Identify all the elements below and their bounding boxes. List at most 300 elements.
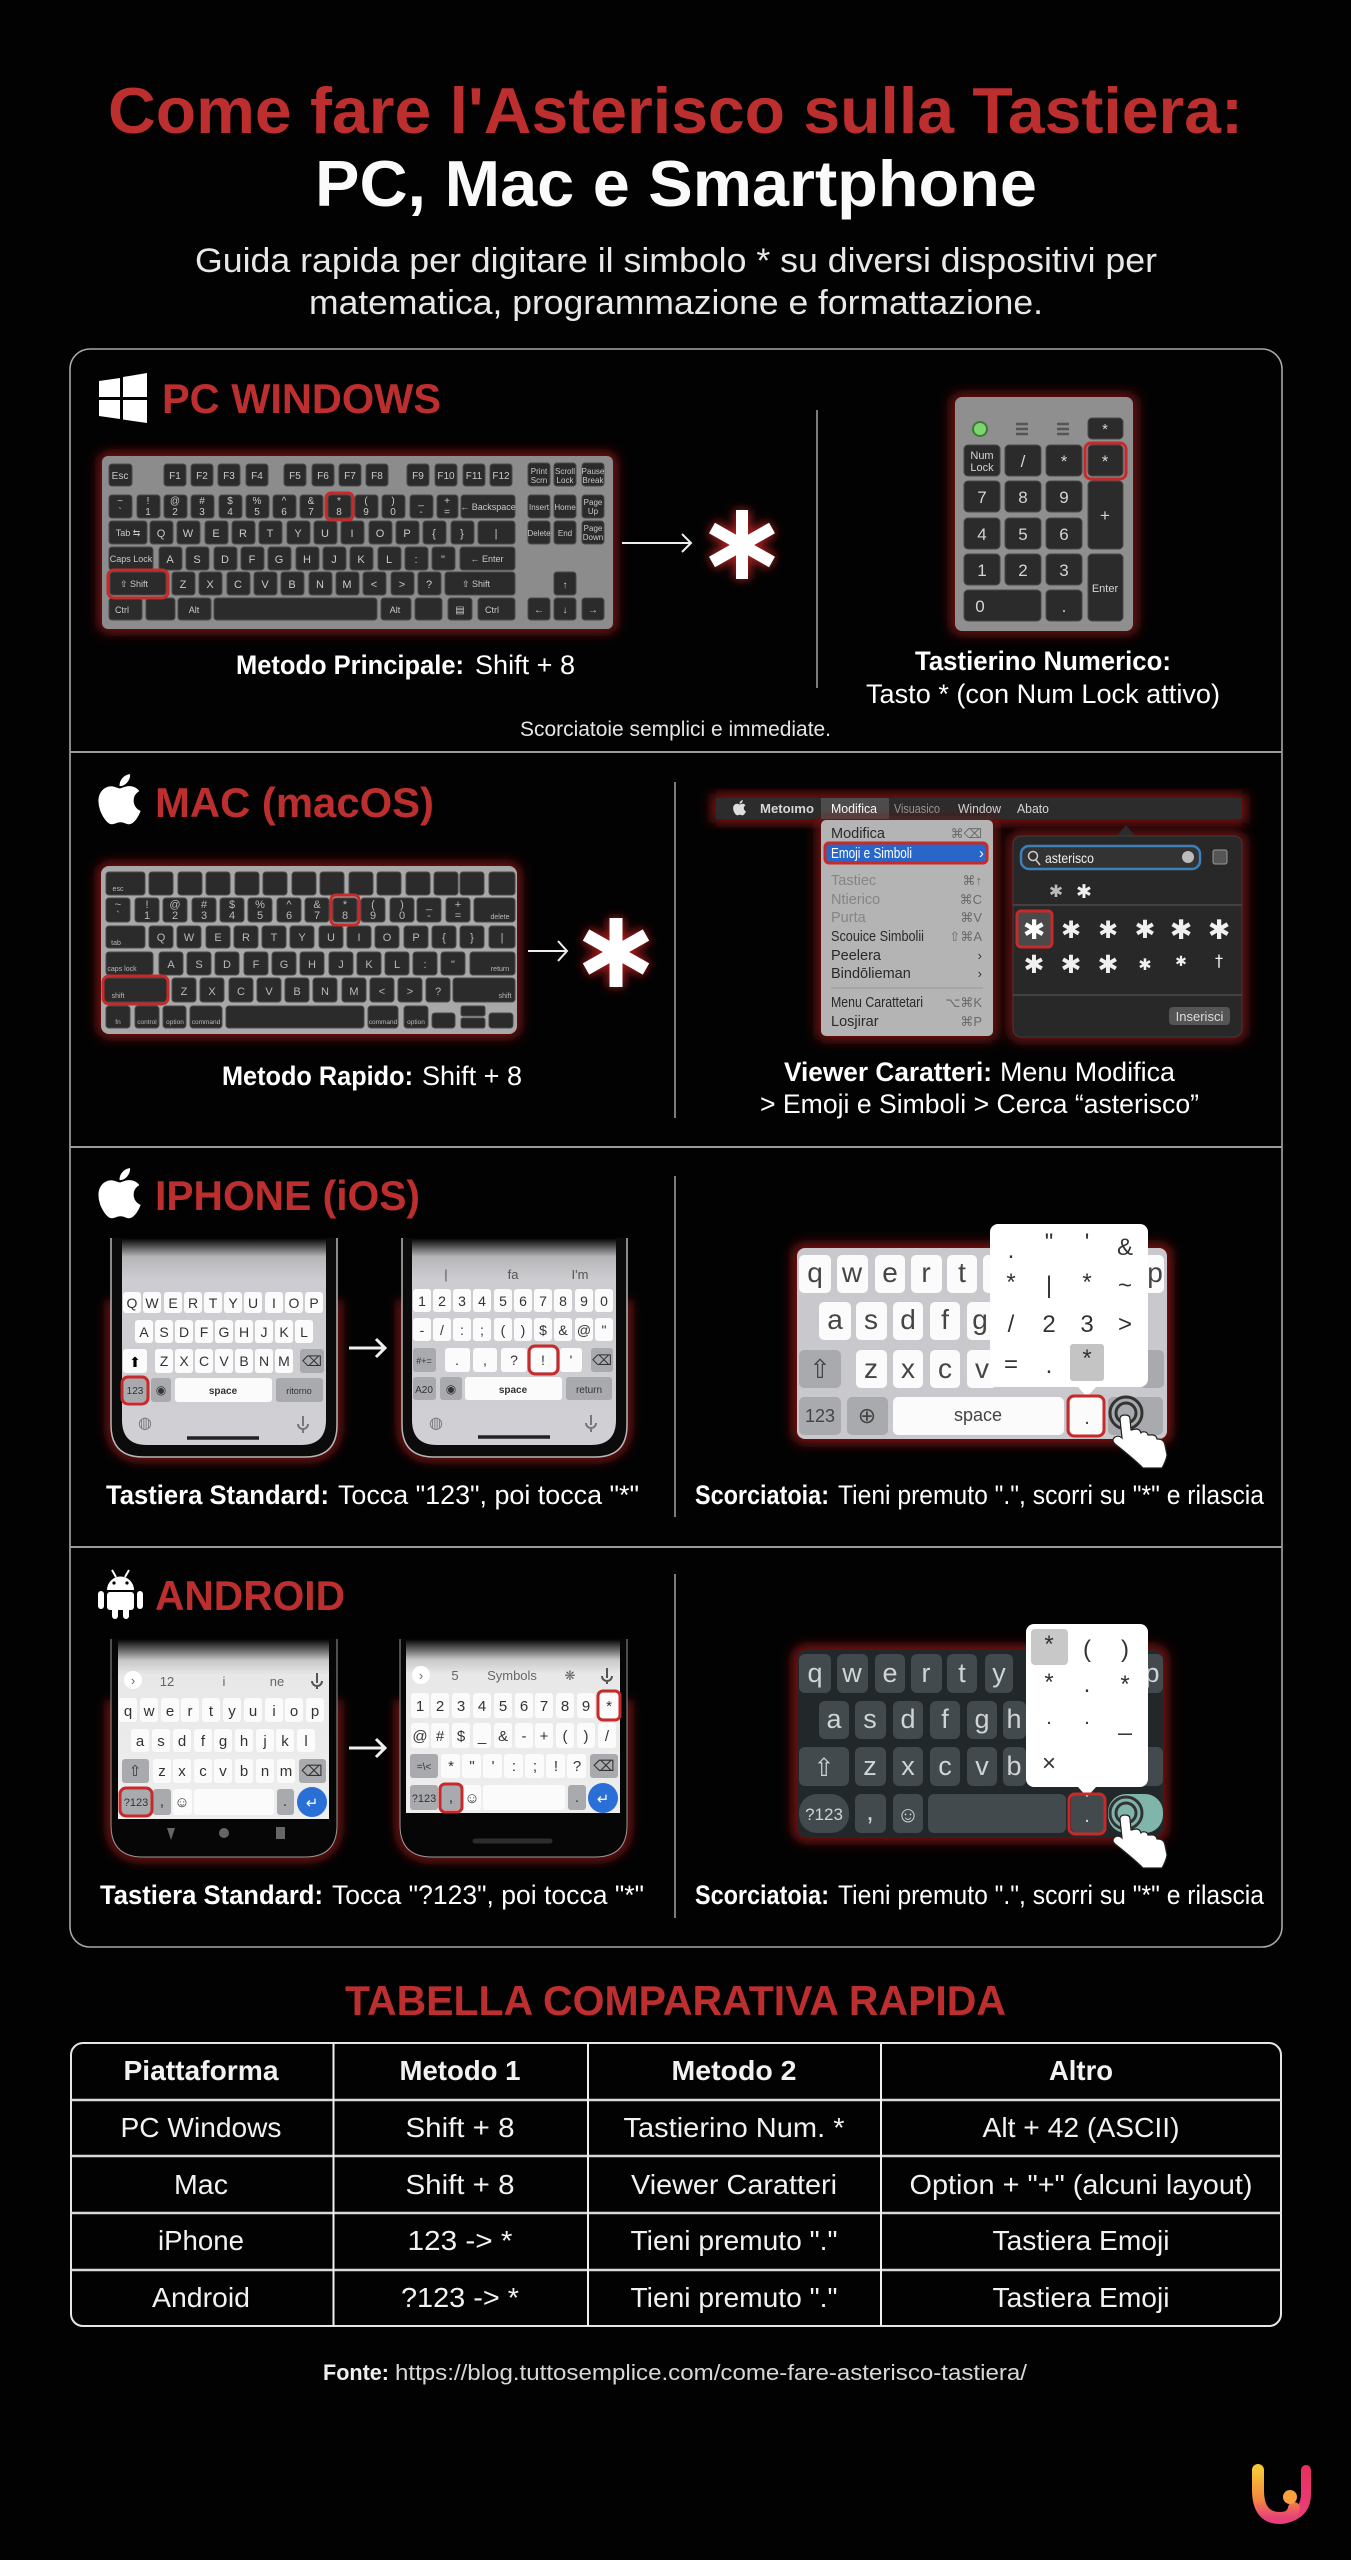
Mac keyboard: & bbox=[313, 899, 321, 911]
phone: standard keyboard: J bbox=[260, 1324, 268, 1340]
phone: symbol keyboard: . bbox=[455, 1352, 459, 1368]
Mac keyboard: # bbox=[201, 899, 208, 911]
phone: symbol keyboard: 3 bbox=[458, 1293, 466, 1309]
PC keyboard: F3 bbox=[223, 471, 235, 482]
phone: standard keyboard: ⌫ bbox=[301, 1763, 323, 1780]
Mac keyboard: shift bbox=[499, 993, 511, 1000]
section: Android bbox=[98, 1570, 1265, 1918]
caption: character viewer: > Emoji e Simboli > Cerca “asterisco” bbox=[760, 1089, 1199, 1119]
PC keyboard: 0 bbox=[390, 507, 396, 518]
row: iPhone: iPhone bbox=[158, 2225, 244, 2256]
PC keyboard: Tab ⇆ bbox=[116, 528, 141, 538]
phone: symbol keyboard: 1 bbox=[416, 1698, 424, 1715]
PC keyboard: C bbox=[234, 579, 242, 591]
row: Android: Tieni premuto "." bbox=[630, 2282, 838, 2313]
caption: standard keyboard: Tastiera Standard: bbox=[100, 1880, 323, 1910]
PC keyboard bbox=[99, 453, 616, 632]
row: Mac: Mac bbox=[174, 2169, 228, 2200]
phone: symbol keyboard: 5 bbox=[451, 1668, 459, 1683]
popup: symbol choices: 2 bbox=[1042, 1311, 1056, 1338]
phone: standard keyboard: k bbox=[281, 1733, 289, 1750]
Mac keyboard: F bbox=[253, 959, 260, 971]
caption: main method: Shift + 8 bbox=[475, 650, 575, 680]
PC keyboard: W bbox=[183, 528, 194, 540]
dropdown menu: Modifica bbox=[831, 826, 886, 842]
keyboard with long-press popup: . bbox=[1084, 1407, 1090, 1429]
phone: symbol keyboard: ⌫ bbox=[593, 1758, 615, 1775]
Mac keyboard: option bbox=[407, 1019, 425, 1026]
popup: symbol choices: * bbox=[1044, 1631, 1054, 1658]
phone: symbol keyboard: #+= bbox=[416, 1356, 432, 1366]
popup: symbol choices: ~ bbox=[1118, 1272, 1132, 1299]
phone: symbol keyboard: / bbox=[440, 1322, 444, 1338]
phone: standard keyboard: W bbox=[145, 1295, 159, 1311]
PC keyboard: > bbox=[399, 579, 405, 591]
table header bbox=[124, 2055, 1113, 2086]
popup: symbol choices: * bbox=[1082, 1345, 1092, 1372]
phone: standard keyboard: V bbox=[219, 1353, 229, 1369]
phone: standard keyboard: h bbox=[240, 1733, 248, 1750]
phone: symbol keyboard: =\< bbox=[417, 1762, 431, 1773]
PC keyboard: & bbox=[308, 496, 315, 507]
phone: standard keyboard: B bbox=[239, 1353, 249, 1369]
title bbox=[108, 74, 1243, 220]
popup: symbol choices: * bbox=[1044, 1669, 1054, 1696]
PC keyboard: B bbox=[288, 579, 296, 591]
table header: Metodo 1 bbox=[400, 2055, 520, 2086]
caption: standard keyboard: Tocca "?123", poi tocca "*" bbox=[332, 1880, 644, 1910]
dark keyboard with long-press popup: g bbox=[974, 1704, 990, 1734]
menu bar bbox=[712, 794, 1246, 823]
PC keyboard: R bbox=[239, 528, 247, 540]
PC keyboard: V bbox=[261, 579, 269, 591]
phone: symbol keyboard: " bbox=[602, 1322, 607, 1338]
PC keyboard: ← Backspace bbox=[460, 502, 516, 512]
phone: standard keyboard: ◍ bbox=[138, 1415, 152, 1432]
popup: symbol choices: " bbox=[1045, 1229, 1053, 1256]
dropdown menu: ⌘C bbox=[960, 892, 982, 907]
character viewer: † bbox=[1215, 951, 1223, 970]
phone: standard keyboard: l bbox=[304, 1733, 308, 1750]
phone: standard keyboard: space bbox=[209, 1386, 238, 1397]
phone: symbol keyboard: 1 bbox=[418, 1293, 426, 1309]
phone: standard keyboard: Y bbox=[228, 1295, 238, 1311]
section: iPhone bbox=[98, 1168, 1265, 1517]
phone: symbol keyboard bbox=[400, 1639, 627, 1857]
numeric keypad: Enter bbox=[1092, 583, 1118, 595]
row: PC Windows: PC Windows bbox=[120, 2112, 282, 2143]
keyboard with long-press popup: r bbox=[921, 1257, 931, 1288]
caption: character viewer bbox=[760, 1057, 1199, 1119]
phone: standard keyboard bbox=[111, 1639, 337, 1857]
character viewer: ✱ bbox=[1061, 950, 1081, 979]
heading: iPhone: IPHONE (iOS) bbox=[155, 1172, 420, 1219]
popup: symbol choices: . bbox=[1046, 1352, 1052, 1379]
Mac keyboard: R bbox=[242, 932, 250, 944]
PC keyboard: N bbox=[316, 579, 324, 591]
PC keyboard: 4 bbox=[227, 507, 233, 518]
dark keyboard with long-press popup: e bbox=[882, 1658, 898, 1688]
phone: symbol keyboard: @ bbox=[577, 1322, 591, 1338]
popup: symbol choices: * bbox=[1082, 1269, 1092, 1296]
numeric keypad: 3 bbox=[1059, 561, 1069, 580]
dark keyboard with long-press popup: d bbox=[900, 1704, 916, 1734]
PC keyboard: Page bbox=[584, 524, 603, 533]
popup: symbol choices: * bbox=[1120, 1671, 1130, 1698]
phone: standard keyboard: N bbox=[259, 1353, 269, 1369]
dark keyboard with long-press popup: y bbox=[992, 1658, 1006, 1688]
Mac keyboard: T bbox=[271, 932, 278, 944]
phone: symbol keyboard: . bbox=[575, 1789, 579, 1806]
phone: symbol keyboard: › bbox=[419, 1668, 423, 1683]
Mac keyboard: 3 bbox=[201, 910, 207, 922]
PC keyboard: Up bbox=[588, 507, 599, 516]
popup: symbol choices bbox=[990, 1224, 1148, 1397]
phone: standard keyboard: s bbox=[157, 1733, 165, 1750]
dark keyboard with long-press popup bbox=[793, 1624, 1167, 1868]
Mac keyboard: A bbox=[167, 959, 175, 971]
phone: symbol keyboard: / bbox=[605, 1728, 610, 1745]
caption: shortcut: Scorciatoia: bbox=[695, 1880, 829, 1910]
dark keyboard with long-press popup: z bbox=[863, 1751, 877, 1781]
PC keyboard: S bbox=[193, 554, 201, 566]
caption: shortcut: Scorciatoia: bbox=[695, 1480, 829, 1510]
section: PC Windows bbox=[99, 373, 1220, 741]
dropdown menu: ⌘⌫ bbox=[951, 826, 982, 841]
Mac keyboard bbox=[98, 863, 520, 1037]
title: PC, Mac e Smartphone bbox=[315, 147, 1037, 220]
PC keyboard: ) bbox=[391, 496, 395, 507]
phone: symbol keyboard: fa bbox=[508, 1267, 519, 1282]
numeric keypad: 2 bbox=[1018, 561, 1028, 580]
Mac keyboard: esc bbox=[113, 886, 124, 893]
Mac keyboard: * bbox=[343, 899, 348, 911]
numeric keypad: 5 bbox=[1018, 525, 1028, 544]
Mac keyboard: I bbox=[357, 932, 361, 944]
caption: numeric keypad bbox=[866, 646, 1220, 709]
phone: symbol keyboard: ☺ bbox=[464, 1790, 480, 1807]
phone: standard keyboard: T bbox=[209, 1295, 218, 1311]
caption: quick method bbox=[222, 1061, 522, 1091]
highlight: ?123 key bbox=[120, 1788, 152, 1816]
caption: quick method: Metodo Rapido: bbox=[222, 1061, 413, 1091]
PC keyboard: M bbox=[342, 579, 352, 591]
Mac keyboard: 8 bbox=[342, 910, 348, 922]
Mac keyboard: Y bbox=[298, 932, 306, 944]
phone: symbol keyboard: * bbox=[606, 1698, 612, 1715]
PC keyboard: } bbox=[460, 528, 464, 540]
PC keyboard: ( bbox=[364, 496, 368, 507]
PC keyboard: Home bbox=[554, 503, 576, 512]
phone: symbol keyboard: ? bbox=[510, 1352, 518, 1368]
phone: symbol keyboard: ; bbox=[533, 1758, 537, 1775]
PC keyboard: ⇧ Shift bbox=[462, 579, 491, 589]
table header: Altro bbox=[1049, 2055, 1113, 2086]
phone: symbol keyboard: 7 bbox=[540, 1698, 548, 1715]
popup: symbol choices: & bbox=[1117, 1234, 1133, 1261]
phone: symbol keyboard: - bbox=[522, 1728, 526, 1745]
popup: symbol choices: = bbox=[1004, 1351, 1018, 1378]
phone: standard keyboard bbox=[111, 1238, 337, 1457]
character viewer: ✱ bbox=[1061, 916, 1081, 944]
dropdown menu: › bbox=[978, 948, 982, 963]
phone: symbol keyboard: _ bbox=[477, 1728, 487, 1745]
heading: Mac: MAC (macOS) bbox=[155, 779, 434, 826]
PC keyboard: → bbox=[588, 605, 598, 616]
PC keyboard: F1 bbox=[169, 471, 181, 482]
phone: symbol keyboard: : bbox=[512, 1758, 516, 1775]
character viewer: ✱ bbox=[1098, 950, 1118, 979]
phone: symbol keyboard: I'm bbox=[572, 1267, 588, 1282]
source: Fonte: bbox=[323, 2360, 389, 2385]
PC keyboard: J bbox=[331, 554, 337, 566]
phone: standard keyboard: › bbox=[131, 1673, 135, 1688]
dark keyboard with long-press popup: b bbox=[1006, 1751, 1022, 1781]
dark keyboard with long-press popup: w bbox=[841, 1658, 862, 1688]
Mac keyboard: option bbox=[166, 1019, 184, 1026]
dropdown menu: Ntierico bbox=[831, 892, 880, 908]
PC keyboard: # bbox=[199, 496, 205, 507]
phone: symbol keyboard: ⌫ bbox=[592, 1352, 612, 1368]
phone: standard keyboard: o bbox=[290, 1703, 298, 1720]
highlight: key 8 bbox=[331, 895, 359, 925]
phone: standard keyboard: P bbox=[309, 1295, 319, 1311]
caption: numeric keypad: Tasto * (con Num Lock attivo) bbox=[866, 679, 1220, 709]
character viewer: ✱ bbox=[1208, 915, 1230, 946]
Mac keyboard: 2 bbox=[172, 910, 178, 922]
numeric keypad: 0 bbox=[975, 597, 985, 616]
PC keyboard: End bbox=[558, 529, 572, 538]
PC keyboard: Caps Lock bbox=[110, 554, 153, 564]
PC keyboard: ← bbox=[534, 605, 544, 616]
Mac keyboard: 5 bbox=[257, 910, 263, 922]
dropdown menu: Scouice Simbolii bbox=[831, 929, 924, 945]
caption: standard keyboard: Tastiera Standard: bbox=[106, 1480, 329, 1510]
character viewer: asterisco bbox=[1045, 850, 1094, 866]
row: iPhone: Tastiera Emoji bbox=[992, 2225, 1170, 2256]
highlight: period key bbox=[1069, 1794, 1105, 1834]
popup: symbol choices: ) bbox=[1121, 1636, 1129, 1663]
row: Mac: Viewer Caratteri bbox=[631, 2169, 837, 2200]
phone: symbol keyboard: A20 bbox=[415, 1385, 433, 1396]
phone: symbol keyboard: 9 bbox=[582, 1698, 590, 1715]
section: Mac bbox=[98, 774, 1246, 1119]
highlight: Emoji e Simboli: Emoji e Simboli bbox=[831, 846, 912, 862]
PC keyboard: A bbox=[166, 554, 174, 566]
phone: standard keyboard: A bbox=[139, 1324, 149, 1340]
icon: Windows logo bbox=[99, 373, 147, 423]
PC keyboard: 9 bbox=[363, 507, 369, 518]
PC keyboard: Down bbox=[583, 533, 603, 542]
Mac keyboard: 0 bbox=[399, 910, 405, 922]
keyboard with long-press popup: z bbox=[864, 1353, 878, 1384]
character viewer: ✱ bbox=[1170, 915, 1192, 946]
Mac keyboard: Q bbox=[157, 932, 166, 944]
keyboard with long-press popup: c bbox=[938, 1353, 952, 1384]
PC keyboard: * bbox=[337, 496, 341, 507]
PC keyboard: F2 bbox=[196, 471, 208, 482]
dark keyboard with long-press popup: ⇧ bbox=[814, 1754, 834, 1782]
phone: symbol keyboard: 5 bbox=[499, 1698, 507, 1715]
PC keyboard: Lock bbox=[557, 476, 574, 485]
Mac keyboard: : bbox=[423, 959, 427, 971]
PC keyboard: F9 bbox=[412, 471, 424, 482]
Mac keyboard: tab bbox=[111, 940, 121, 947]
phone: symbol keyboard: return bbox=[576, 1385, 602, 1396]
character viewer: ✱ bbox=[1138, 955, 1152, 974]
caption: quick method: Shift + 8 bbox=[422, 1061, 522, 1091]
Mac keyboard: B bbox=[293, 986, 301, 998]
phone: standard keyboard: I bbox=[272, 1295, 276, 1311]
Mac keyboard: W bbox=[184, 932, 195, 944]
row: iPhone: Tieni premuto "." bbox=[630, 2225, 838, 2256]
keyboard with long-press popup: d bbox=[900, 1304, 916, 1335]
phone: standard keyboard: ritorno bbox=[286, 1386, 312, 1396]
keyboard with long-press popup: s bbox=[864, 1304, 878, 1335]
dark keyboard with long-press popup: v bbox=[975, 1751, 989, 1781]
phone: standard keyboard: z bbox=[158, 1763, 166, 1780]
popup: symbol choices: / bbox=[1008, 1311, 1015, 1338]
phone: standard keyboard: 12 bbox=[160, 1674, 174, 1689]
phone: standard keyboard: b bbox=[240, 1763, 248, 1780]
PC keyboard: = bbox=[444, 507, 450, 518]
phone: standard keyboard: i bbox=[272, 1703, 276, 1720]
keyboard with long-press popup bbox=[793, 1224, 1171, 1468]
phone: standard keyboard: R bbox=[188, 1295, 198, 1311]
Mac keyboard: - bbox=[427, 910, 431, 922]
numeric keypad: 9 bbox=[1059, 488, 1069, 507]
PC keyboard: Esc bbox=[112, 471, 128, 482]
Mac keyboard: $ bbox=[229, 899, 235, 911]
Mac keyboard: control bbox=[137, 1019, 157, 1026]
character viewer: ✱ bbox=[1023, 915, 1045, 946]
phone: symbol keyboard: + bbox=[540, 1728, 549, 1745]
highlight: key 8 bbox=[326, 493, 353, 520]
phone: symbol keyboard: Symbols bbox=[487, 1668, 537, 1683]
PC keyboard: F11 bbox=[466, 471, 483, 482]
highlight: period key bbox=[1068, 1396, 1104, 1436]
phone: symbol keyboard bbox=[402, 1238, 627, 1457]
caption: shortcut: Tieni premuto ".", scorri su "*" e rilascia bbox=[838, 1880, 1265, 1910]
dark keyboard with long-press popup: q bbox=[807, 1658, 823, 1688]
PC keyboard: 3 bbox=[199, 507, 205, 518]
highlight: Emoji e Simboli: › bbox=[979, 846, 984, 862]
PC keyboard: Y bbox=[294, 528, 302, 540]
phone: symbol keyboard: ! bbox=[541, 1352, 545, 1368]
arrow bbox=[349, 1339, 385, 1357]
Mac keyboard: { bbox=[442, 932, 446, 944]
PC keyboard: F7 bbox=[344, 471, 356, 482]
character viewer: ✱ bbox=[1098, 916, 1118, 944]
row: Mac: Option + "+" (alcuni layout) bbox=[910, 2169, 1252, 2200]
phone: standard keyboard: 123 bbox=[127, 1386, 144, 1397]
Mac keyboard: P bbox=[412, 932, 420, 944]
Mac keyboard: fn bbox=[115, 1019, 121, 1026]
numeric keypad bbox=[951, 394, 1137, 634]
phone: symbol keyboard: # bbox=[436, 1728, 445, 1745]
PC keyboard: $ bbox=[227, 496, 233, 507]
table header: Piattaforma bbox=[124, 2055, 279, 2086]
phone: symbol keyboard: ; bbox=[480, 1322, 484, 1338]
phone: symbol keyboard: & bbox=[498, 1728, 508, 1745]
heading: Android: ANDROID bbox=[155, 1572, 345, 1619]
phone: standard keyboard: w bbox=[143, 1703, 155, 1720]
PC keyboard: Alt bbox=[390, 605, 401, 615]
phone: standard keyboard: Z bbox=[160, 1353, 169, 1369]
dark keyboard with long-press popup: ☺ bbox=[897, 1802, 919, 1827]
subtitle bbox=[195, 242, 1157, 322]
dark keyboard with long-press popup: a bbox=[826, 1704, 842, 1734]
menu bar: Window bbox=[958, 801, 1002, 816]
caption: numeric keypad: Tastierino Numerico: bbox=[915, 646, 1171, 676]
PC keyboard: Alt bbox=[189, 605, 200, 615]
Mac keyboard: E bbox=[214, 932, 222, 944]
phone: standard keyboard: . bbox=[283, 1793, 287, 1810]
phone: standard keyboard: C bbox=[199, 1353, 209, 1369]
note: Scorciatoie semplici e immediate. bbox=[520, 718, 831, 741]
phone: symbol keyboard: ↵ bbox=[597, 1791, 609, 1808]
Mac keyboard: 9 bbox=[370, 910, 376, 922]
keyboard with long-press popup: p bbox=[1147, 1257, 1163, 1288]
Mac keyboard: L bbox=[394, 959, 400, 971]
phone: symbol keyboard: $ bbox=[457, 1728, 466, 1745]
dropdown menu: ⌘V bbox=[960, 910, 982, 925]
PC keyboard: 6 bbox=[281, 507, 287, 518]
phone: symbol keyboard: 5 bbox=[499, 1293, 507, 1309]
menu bar: Metoımo bbox=[760, 801, 814, 816]
highlight: Emoji e Simboli bbox=[825, 843, 987, 863]
keyboard with long-press popup: space bbox=[954, 1405, 1002, 1425]
PC keyboard: F4 bbox=[251, 471, 263, 482]
phone: symbol keyboard: , bbox=[483, 1352, 487, 1368]
Mac keyboard: + bbox=[455, 899, 461, 911]
phone: standard keyboard: m bbox=[280, 1763, 292, 1780]
row: PC Windows bbox=[120, 2112, 1180, 2143]
phone: standard keyboard: ne bbox=[270, 1674, 284, 1689]
PC keyboard: ~ bbox=[117, 496, 123, 507]
table header: Metodo 2 bbox=[672, 2055, 796, 2086]
PC keyboard: 5 bbox=[254, 507, 260, 518]
row: PC Windows: Shift + 8 bbox=[406, 2112, 514, 2143]
highlight: keypad asterisk bbox=[1085, 443, 1126, 479]
phone: symbol keyboard: ?123 bbox=[412, 1793, 436, 1805]
dropdown menu: Peelera bbox=[831, 948, 882, 964]
phone: standard keyboard: ⬆ bbox=[129, 1354, 141, 1370]
PC keyboard: Z bbox=[180, 579, 187, 591]
PC keyboard: Insert bbox=[529, 503, 550, 512]
comparison table bbox=[71, 2043, 1281, 2326]
PC keyboard: ? bbox=[426, 579, 432, 591]
heading: PC Windows: PC WINDOWS bbox=[162, 375, 441, 422]
PC keyboard: ⇧ Shift bbox=[120, 579, 149, 589]
Mac keyboard: > bbox=[407, 986, 413, 998]
keyboard with long-press popup: f bbox=[941, 1304, 949, 1335]
PC keyboard: F bbox=[249, 554, 256, 566]
PC keyboard: F8 bbox=[371, 471, 383, 482]
phone: standard keyboard: g bbox=[219, 1733, 227, 1750]
dark keyboard with long-press popup: h bbox=[1006, 1704, 1022, 1734]
phone: standard keyboard: q bbox=[124, 1703, 132, 1720]
numeric keypad: 8 bbox=[1018, 488, 1028, 507]
PC keyboard: D bbox=[221, 554, 229, 566]
numeric keypad: 1 bbox=[977, 561, 987, 580]
popup: symbol choices: . bbox=[1084, 1707, 1090, 1729]
row: Android: Tastiera Emoji bbox=[992, 2282, 1170, 2313]
PC keyboard: I bbox=[350, 528, 354, 540]
phone: standard keyboard: e bbox=[166, 1703, 174, 1720]
dark keyboard with long-press popup: , bbox=[866, 1796, 874, 1826]
Mac keyboard: ~ bbox=[115, 899, 121, 911]
